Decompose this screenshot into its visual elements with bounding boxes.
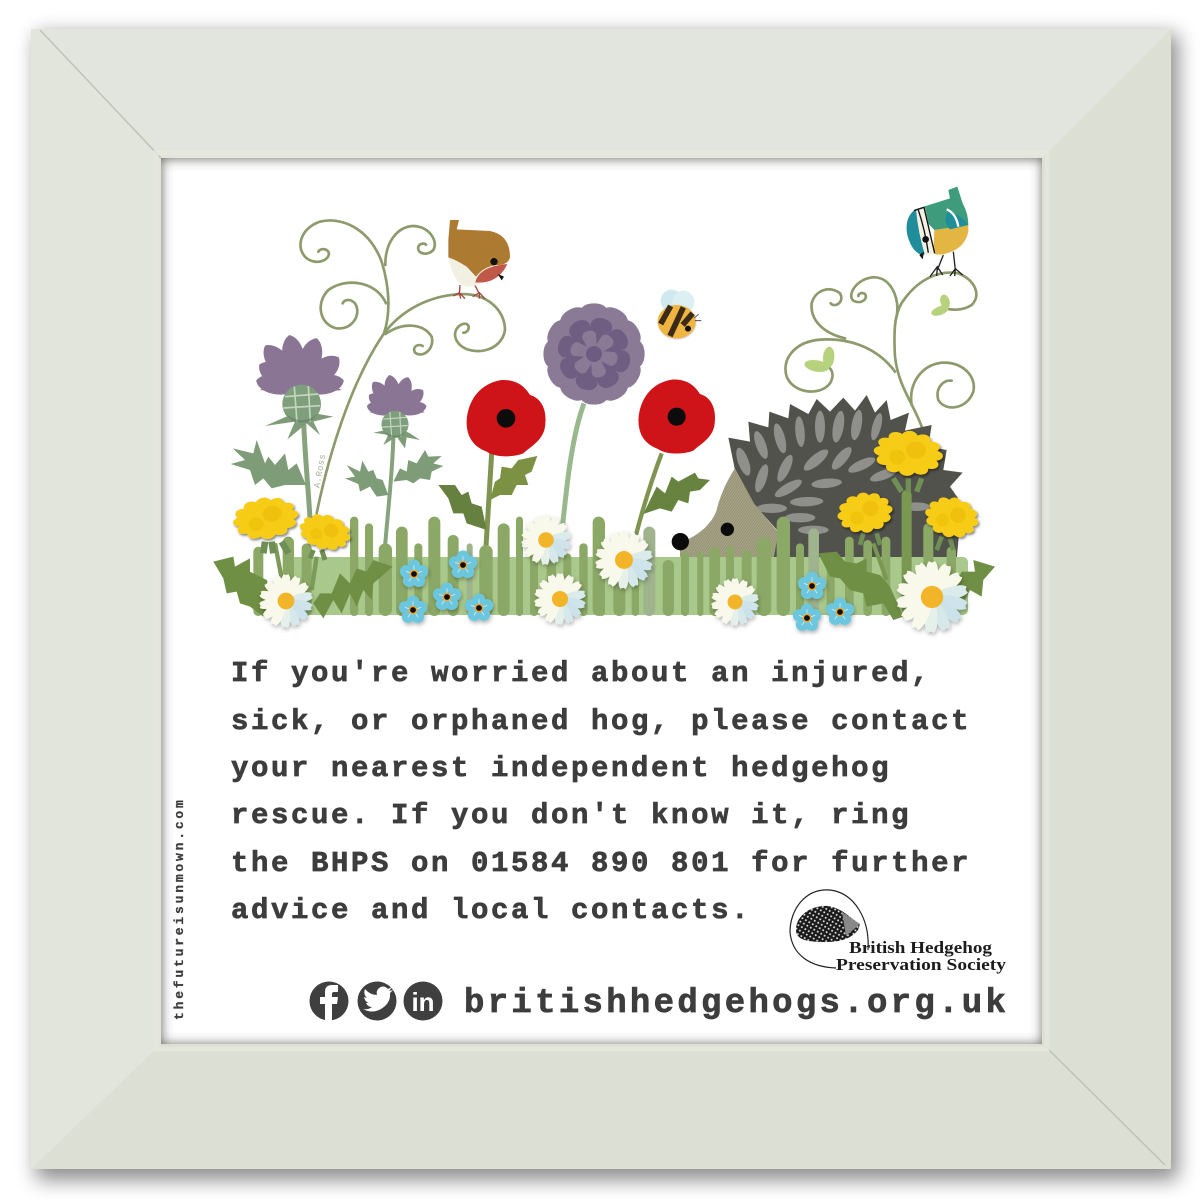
hedgehog spiky body [728, 395, 963, 560]
hedgehog nose and eye [672, 523, 734, 550]
rescue advice text [231, 657, 971, 927]
forget-me-nots [397, 550, 856, 633]
robin [448, 220, 510, 299]
social icon: linkedin [404, 982, 442, 1020]
dandelion lower left [835, 489, 895, 536]
left curling tendrils [300, 220, 505, 513]
BHPS logo [790, 890, 1007, 974]
rescue advice text: sick, or orphaned hog, please contact [231, 705, 971, 738]
grass blades right [598, 490, 956, 616]
rescue advice text: advice and local contacts. [231, 894, 751, 927]
thistle leaves [231, 440, 443, 497]
grass band [285, 557, 968, 615]
hedgehog face [680, 468, 778, 560]
social icon: facebook [310, 982, 348, 1021]
website address: britishhedgehogs.org.uk [464, 985, 1009, 1023]
allium flower [542, 302, 646, 406]
dandelion stalks right [860, 478, 953, 580]
social icon: twitter [358, 982, 396, 1020]
tendril sprouts [804, 293, 951, 374]
dandelion stalks left [263, 542, 325, 590]
artist signature: A.Ross [312, 453, 328, 489]
logo name: British Hedgehog [849, 938, 993, 957]
rescue advice text: rescue. If you don't know it, ring [231, 799, 911, 832]
meadow grass [253, 490, 968, 616]
thistle stems [304, 422, 393, 547]
white picture window [155, 152, 1049, 1051]
illustration: right half [636, 187, 976, 560]
right curling tendrils [786, 273, 976, 427]
blue tit [907, 187, 968, 277]
dandelion lower right [921, 492, 982, 543]
right dandelions [818, 428, 995, 620]
right poppy [636, 379, 715, 535]
logo oval [790, 890, 868, 968]
rescue advice text: If you're worried about an injured, [231, 657, 931, 690]
social icon: linkedin: in [411, 987, 435, 1017]
BHPS logo: Preservation Society [836, 955, 1007, 974]
large thistle [254, 333, 346, 439]
allium stem [563, 403, 584, 525]
hedgehog [680, 395, 963, 560]
rescue advice text: your nearest independent hedgehog [231, 752, 891, 785]
bee [658, 290, 701, 338]
illustration: left half [231, 220, 584, 547]
dandelion small [296, 509, 354, 555]
vertical credit text: thefutureisunmown.com [172, 797, 187, 1020]
dandelion top [872, 428, 945, 479]
rescue advice text: the BHPS on 01584 890 801 for further [231, 847, 971, 880]
left poppy [438, 380, 546, 547]
dandelion leaves right [818, 552, 995, 620]
daisies [259, 515, 968, 633]
hedgehog quills [733, 409, 930, 534]
small thistle [365, 374, 428, 448]
grass blades left [253, 517, 605, 616]
dandelion leaves left [213, 557, 393, 618]
logo hedgehog [796, 906, 860, 942]
dandelion large [230, 493, 301, 544]
left dandelions [213, 493, 393, 618]
